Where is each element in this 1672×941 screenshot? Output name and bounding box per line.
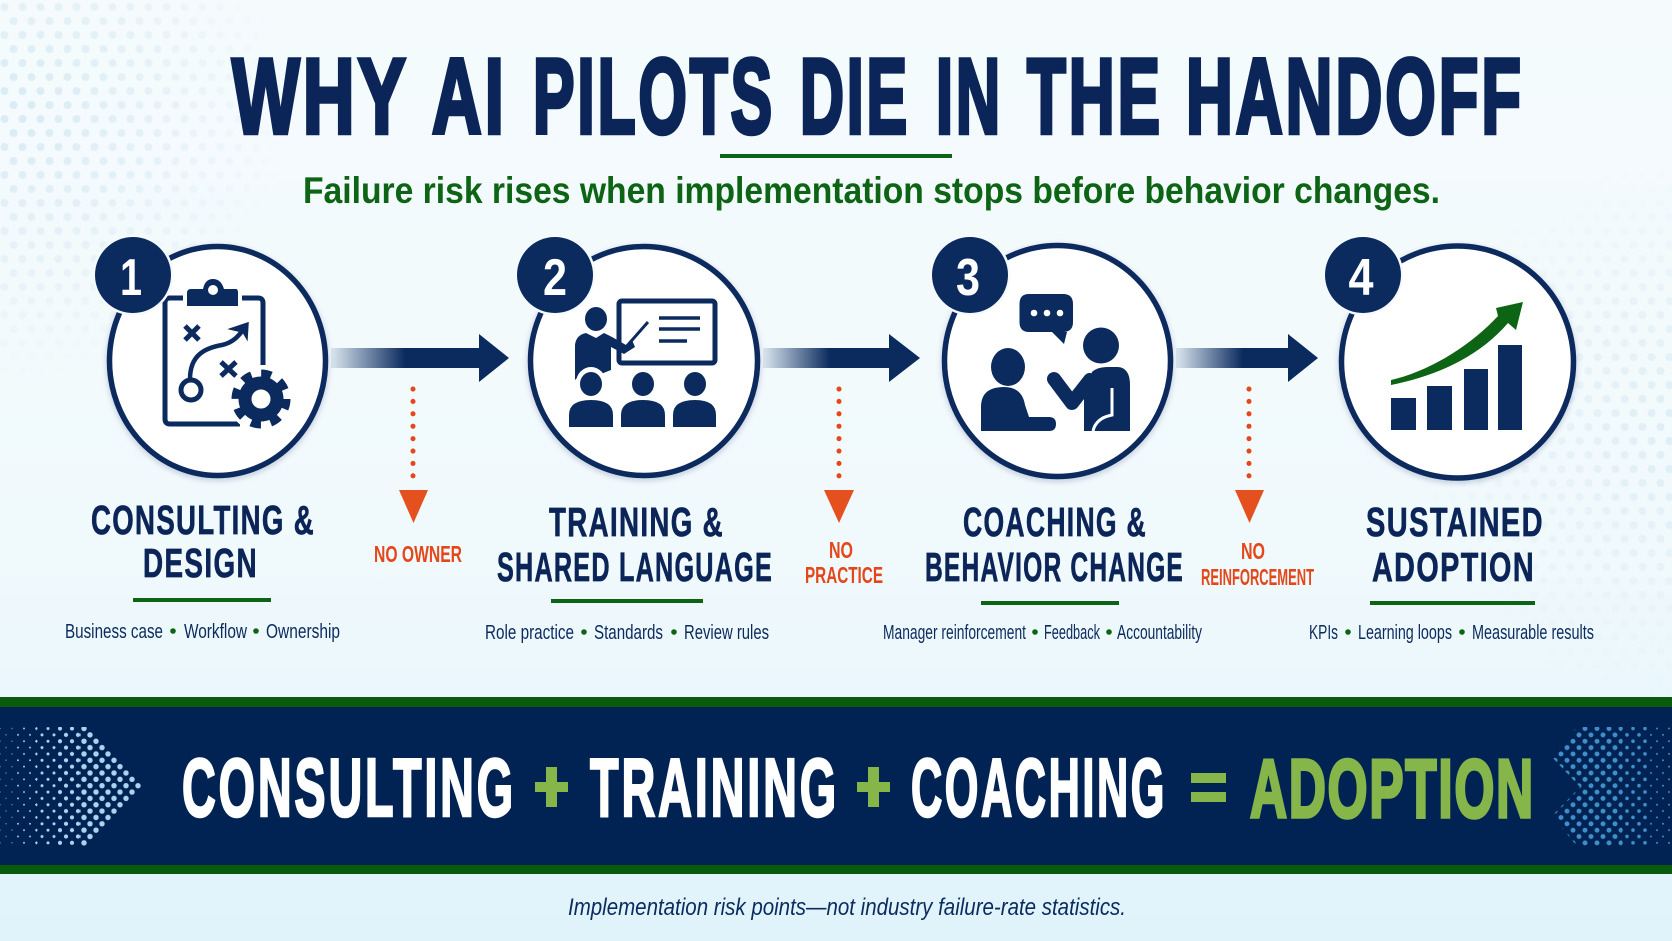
risk arrow: no reinforcement [1235, 389, 1264, 523]
risk label: no reinforcement: NO [1241, 538, 1265, 564]
step 1 circle [95, 237, 326, 476]
details step 4: Learning loops [1358, 622, 1452, 644]
details step 3: Manager reinforcement [883, 622, 1026, 644]
equals sign [1191, 773, 1226, 802]
risk label: no reinforcement: REINFORCEMENT [1201, 564, 1314, 590]
details step 4: KPIs [1309, 622, 1338, 644]
footnote: Implementation risk points—not industry failure-rate statistics. [568, 894, 1126, 921]
chevron dots left [0, 727, 142, 846]
number badge 4 [1325, 237, 1401, 313]
number badge 4: 4 [1348, 249, 1374, 307]
plus sign 2 [857, 767, 890, 807]
step 2 circle [517, 237, 758, 476]
number badge 3 [932, 237, 1008, 313]
number badge 1 [95, 237, 171, 313]
equation: training: TRAINING [590, 741, 839, 834]
risk arrow: no practice [824, 389, 854, 523]
details step 3: Accountability [1117, 622, 1202, 644]
title: AI [432, 36, 507, 156]
details step 3: Feedback [1044, 622, 1101, 644]
title: WHY [232, 36, 409, 156]
banner [0, 697, 1672, 874]
heading: consulting and design: CONSULTING & [91, 497, 315, 543]
title: THE [1027, 36, 1163, 156]
step 3 circle [932, 237, 1170, 476]
icon: coaching conversation [981, 294, 1130, 431]
number badge 3: 3 [956, 249, 980, 307]
risk arrow: no owner [399, 389, 428, 523]
heading: coaching and behavior change: COACHING & [963, 499, 1147, 545]
details step 4 [1309, 622, 1594, 644]
risk label: no reinforcement [1201, 538, 1314, 590]
heading: training and shared language: SHARED LANGUAGE [497, 544, 773, 590]
risk label: no practice: PRACTICE [805, 562, 883, 588]
heading: sustained adoption: ADOPTION [1372, 544, 1535, 590]
title: IN [936, 36, 1003, 156]
underline step 1 [133, 598, 271, 602]
arrow: step 1 to step 2 [331, 334, 509, 382]
details step 4: Measurable results [1472, 622, 1594, 644]
heading: sustained adoption [1366, 499, 1544, 590]
title underline [720, 154, 952, 158]
risk label: no practice: NO [829, 537, 853, 563]
heading: training and shared language [497, 499, 773, 590]
heading: consulting and design: DESIGN [143, 540, 258, 586]
icon: presenter and audience [569, 301, 716, 427]
step 4 circle [1325, 237, 1574, 478]
title [232, 36, 1524, 156]
risk label: no owner: NO OWNER [374, 541, 462, 567]
number badge 2 [517, 237, 593, 313]
title: PILOTS [533, 36, 775, 156]
heading: coaching and behavior change: BEHAVIOR CHANGE [925, 544, 1184, 590]
details step 1: Ownership [266, 621, 340, 643]
heading: consulting and design [91, 497, 315, 586]
details step 1: Workflow [184, 621, 247, 643]
heading: training and shared language: TRAINING & [549, 499, 724, 545]
equation: coaching: COACHING [911, 741, 1167, 834]
heading: coaching and behavior change [925, 499, 1184, 590]
details step 3 [883, 622, 1202, 644]
details step 2: Standards [594, 622, 663, 644]
icon: growth bars with arrow [1391, 302, 1523, 430]
underline step 4 [1370, 601, 1535, 605]
number badge 2: 2 [543, 249, 567, 307]
arrow: step 3 to step 4 [1176, 334, 1318, 382]
risk label: no practice [805, 537, 883, 588]
details step 1: Business case [65, 621, 163, 643]
details step 2: Review rules [684, 622, 769, 644]
subtitle: Failure risk rises when implementation stops before behavior changes. [303, 170, 1440, 211]
heading: sustained adoption: SUSTAINED [1366, 499, 1544, 545]
title: DIE [800, 36, 910, 156]
details step 2: Role practice [485, 622, 574, 644]
number badge 1: 1 [120, 249, 142, 307]
icon: clipboard play with gear [165, 279, 294, 432]
details step 2 [485, 622, 769, 644]
underline step 2 [551, 599, 703, 603]
details step 1 [65, 621, 340, 643]
equation: consulting: CONSULTING [182, 741, 516, 834]
underline step 3 [981, 601, 1119, 605]
plus sign 1 [535, 767, 568, 807]
arrow: step 2 to step 3 [763, 334, 920, 382]
chevron dots right [1552, 727, 1672, 846]
